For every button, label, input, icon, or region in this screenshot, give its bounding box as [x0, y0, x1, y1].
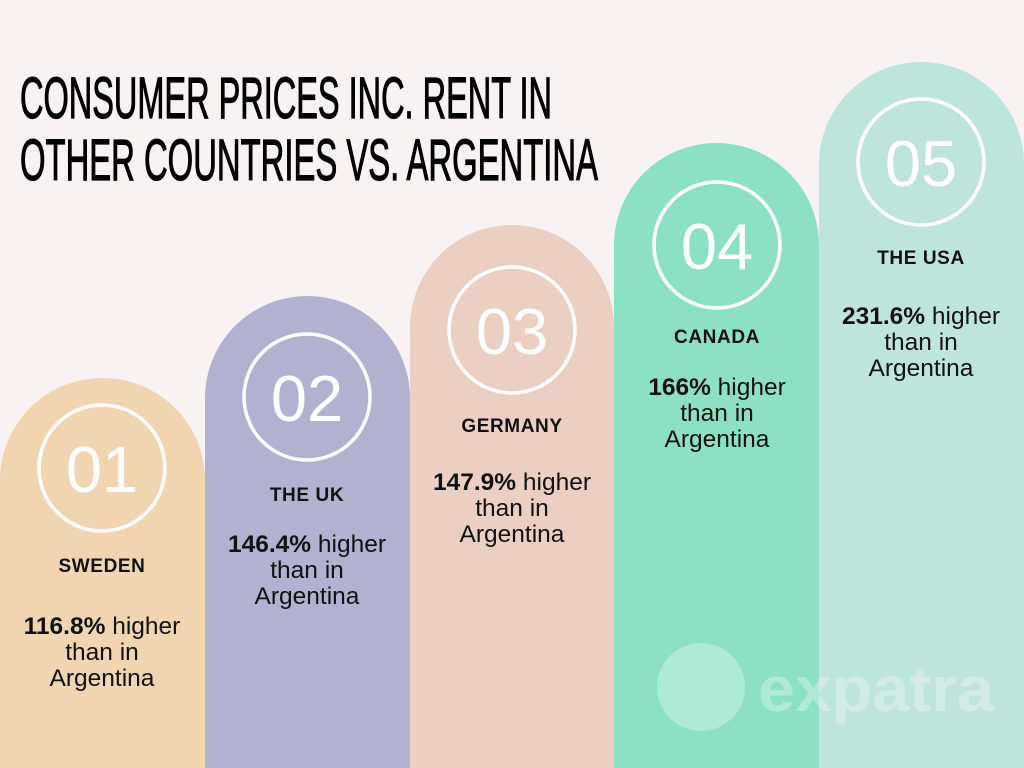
- panel: Canada: [614, 143, 819, 768]
- text: Germany value: than in: [475, 495, 549, 522]
- text: Canada value: than in: [680, 400, 754, 427]
- text: Sweden value: than in: [65, 639, 139, 666]
- icon: number circle 01: [39, 405, 165, 531]
- label: Germany: GERMANY: [461, 416, 563, 437]
- text: UK value: 146.4% higher: [228, 531, 386, 558]
- logo: expatra watermark: [657, 643, 994, 731]
- text: USA value: Argentina: [869, 355, 974, 382]
- text: Canada value: Argentina: [665, 426, 770, 453]
- icon: number circle 02: 02: [271, 362, 343, 435]
- panel: Germany: [410, 225, 614, 768]
- label: Canada: CANADA: [674, 327, 760, 348]
- text: USA value: 231.6% higher: [842, 303, 1000, 330]
- icon: number circle 04: 04: [681, 210, 753, 283]
- text: Germany value: Argentina: [460, 521, 565, 548]
- label: The UK: THE UK: [270, 485, 344, 506]
- icon: number circle 03: [449, 267, 575, 393]
- icon: number circle 01: 01: [66, 433, 138, 506]
- text: Sweden value: 116.8% higher: [24, 613, 180, 640]
- logo: expatra watermark: expatra: [758, 653, 994, 725]
- text: USA value: than in: [884, 329, 958, 356]
- icon: number circle 04: [654, 182, 780, 308]
- icon: number circle 02: [244, 334, 370, 460]
- text: Germany value: 147.9% higher: [433, 469, 591, 496]
- label: Sweden: SWEDEN: [58, 556, 146, 577]
- title: CONSUMER PRICES INC. RENT IN: [20, 66, 552, 131]
- title: [20, 66, 598, 193]
- text: UK value: than in: [270, 557, 344, 584]
- text: Sweden value: Argentina: [50, 665, 155, 692]
- panel: The UK: [205, 296, 410, 768]
- title: OTHER COUNTRIES VS. ARGENTINA: [20, 128, 598, 193]
- text: UK value: Argentina: [255, 583, 360, 610]
- icon: number circle 03: 03: [476, 295, 548, 368]
- label: The USA: THE USA: [877, 248, 965, 269]
- panel: The USA: [819, 62, 1024, 768]
- text: Canada value: 166% higher: [648, 374, 786, 401]
- panel: Sweden: [0, 378, 205, 768]
- icon: number circle 05: [858, 99, 984, 225]
- icon: number circle 05: 05: [885, 127, 957, 200]
